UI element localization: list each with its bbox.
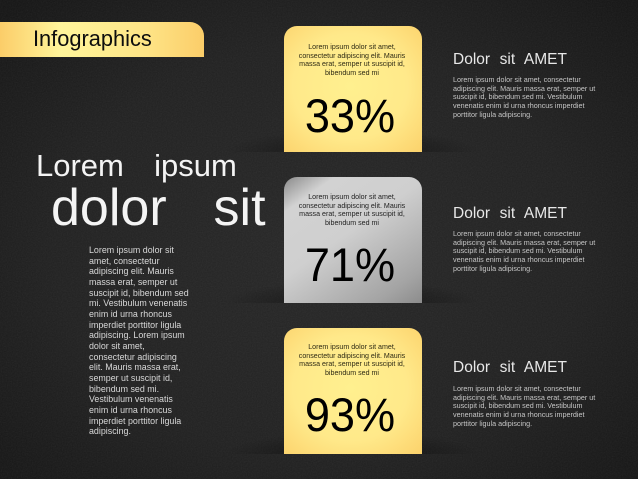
left body text: massa erat, semper ut (89, 277, 177, 287)
title tab (0, 22, 204, 57)
left body text: imperdiet porttitor ligula (89, 320, 181, 330)
card text: consectetur adipiscing elit. Mauris (299, 352, 405, 360)
description: item 3: adipiscing elit. Mauris massa erat, semper ut (453, 393, 595, 402)
description: item 1: venenatis enim id urna rhoncus imperdiet (453, 101, 584, 110)
left body text: mi. Vestibulum venenatis (89, 298, 187, 308)
percentage: 33% (305, 89, 395, 142)
panel: card 93% (284, 328, 422, 454)
card text: consectetur adipiscing elit. Mauris (299, 52, 405, 60)
left body text: enim id urna rhoncus (89, 309, 172, 319)
description: item 1: porttitor ligula adipiscing. (453, 110, 532, 119)
left body text: elit. Mauris massa erat, (89, 362, 181, 372)
left body text: adipiscing. Lorem ipsum (89, 330, 185, 340)
title text: Infographics (33, 26, 152, 51)
description: item 3: Lorem ipsum dolor sit amet, consectetur (453, 384, 581, 393)
description: item 1: adipiscing elit. Mauris massa erat, semper ut (453, 84, 595, 93)
left body text: imperdiet porttitor ligula (89, 416, 181, 426)
heading: item 3: Dolor sit AMET (453, 359, 567, 376)
left body text: adipiscing. (89, 426, 131, 436)
description: item 1: Lorem ipsum dolor sit amet, consectetur (453, 75, 581, 84)
card text: bibendum sed mi (325, 219, 379, 227)
left body text: amet, consectetur (89, 256, 160, 266)
description: item 2: porttitor ligula adipiscing. (453, 264, 532, 273)
description: item 3: venenatis enim id urna rhoncus imperdiet (453, 410, 584, 419)
card text (299, 193, 405, 227)
card text: consectetur adipiscing elit. Mauris (299, 202, 405, 210)
card text: bibendum sed mi (325, 369, 379, 377)
description: item 2: adipiscing elit. Mauris massa erat, semper ut (453, 238, 595, 247)
card text: Lorem ipsum dolor sit amet, (308, 43, 396, 51)
panel: card 71% (284, 177, 422, 303)
left body text: suscipit id, bibendum sed (89, 288, 189, 298)
description: item 2: Lorem ipsum dolor sit amet, consectetur (453, 229, 581, 238)
heading: item 2: Dolor sit AMET (453, 205, 567, 222)
heading: lorem ipsum: Lorem ipsum (36, 148, 237, 183)
card text: massa erat, semper ut suscipit id, (299, 360, 405, 368)
description: item 2: suscipit id, bibendum sed mi. Vestibulum (453, 246, 582, 255)
panel: card 33% (284, 26, 422, 152)
left body text: Vestibulum venenatis (89, 394, 173, 404)
card text (299, 343, 405, 377)
heading: item 1: Dolor sit AMET (453, 51, 567, 68)
description: item 1 (453, 75, 596, 119)
description: item 3: suscipit id, bibendum sed mi. Vestibulum (453, 401, 582, 410)
left body text: dolor sit amet, (89, 341, 145, 351)
card text (299, 43, 405, 77)
card text: bibendum sed mi (325, 69, 379, 77)
card text: massa erat, semper ut suscipit id, (299, 210, 405, 218)
percentage: 71% (305, 238, 395, 291)
left body text: enim id urna rhoncus (89, 405, 172, 415)
left body text: semper ut suscipit id, (89, 373, 172, 383)
percentage: 93% (305, 388, 395, 441)
left body text: bibendum sed mi. (89, 384, 159, 394)
description: item 2: venenatis enim id urna rhoncus imperdiet (453, 255, 584, 264)
description: item 3: porttitor ligula adipiscing. (453, 419, 532, 428)
left body text: consectetur adipiscing (89, 352, 177, 362)
left body text: adipiscing elit. Mauris (89, 266, 174, 276)
description: item 2 (453, 229, 596, 273)
heading: dolor sit: dolor sit (51, 179, 266, 237)
left body text: Lorem ipsum dolor sit (89, 245, 174, 255)
description: item 3 (453, 384, 596, 428)
card text: massa erat, semper ut suscipit id, (299, 60, 405, 68)
left body text (89, 245, 189, 436)
card text: Lorem ipsum dolor sit amet, (308, 193, 396, 201)
card text: Lorem ipsum dolor sit amet, (308, 343, 396, 351)
description: item 1: suscipit id, bibendum sed mi. Vestibulum (453, 92, 582, 101)
